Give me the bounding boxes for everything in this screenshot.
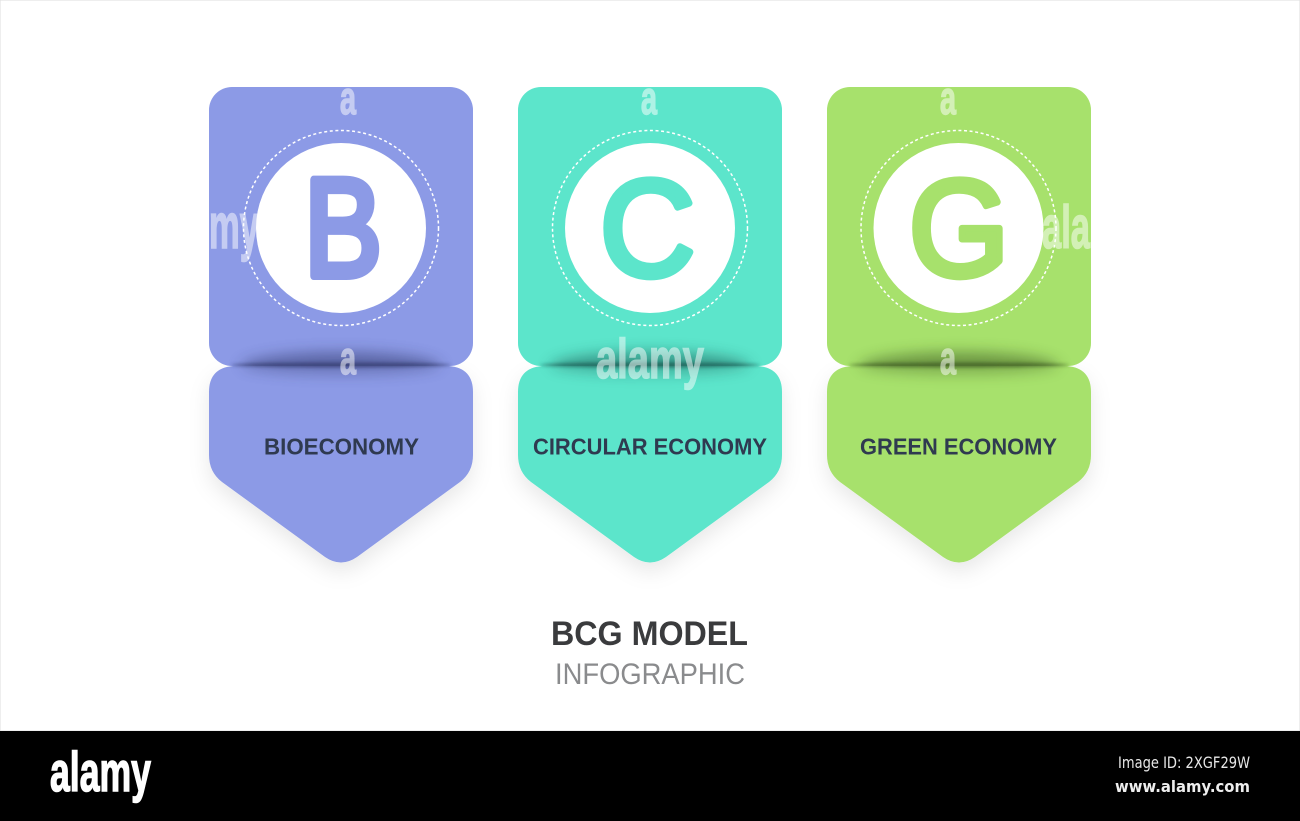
top card: circular economy: [518, 87, 782, 366]
watermark fragments: [940, 72, 1090, 384]
top card: bioeconomy: [209, 87, 473, 366]
footer band: [0, 731, 1300, 821]
watermark fragments: a: [340, 72, 356, 124]
arrow tab: bioeconomy: [209, 366, 473, 562]
dashed ring: [861, 130, 1056, 326]
fold shadow: bioeconomy: [231, 352, 451, 384]
label: bioeconomy: BIOECONOMY: [264, 434, 419, 460]
watermark fragments: ala: [1042, 194, 1090, 261]
subtitle: INFOGRAPHIC: [555, 658, 745, 691]
watermark fragments: a: [641, 72, 657, 124]
watermark fragments: my: [209, 190, 259, 262]
badge circle: [874, 143, 1044, 313]
arrow tab: green economy: [827, 366, 1091, 562]
panel: circular economy: [518, 72, 782, 562]
fold shadow: green economy: [849, 352, 1069, 384]
letter G: G: [909, 152, 1009, 306]
watermark fragments: a: [340, 332, 356, 384]
badge circle: [565, 143, 735, 313]
website: www.alamy.com: [1115, 777, 1250, 796]
watermark fragments: [209, 72, 356, 384]
letter C: C: [600, 152, 695, 306]
watermark fragments: [596, 72, 704, 390]
footer logo: alamy: [50, 740, 151, 803]
watermark fragments: a: [940, 72, 956, 124]
image id: Image ID: 2XGF29W: [1118, 753, 1250, 772]
panel: bioeconomy: [209, 72, 473, 562]
panel: green economy: [827, 72, 1091, 562]
dashed ring: [244, 130, 438, 326]
arrow tab: circular economy: [518, 366, 782, 562]
title: BCG MODEL: [551, 615, 748, 653]
top card: green economy: [827, 87, 1091, 366]
badge circle: [256, 143, 426, 313]
watermark fragments: alamy: [596, 327, 704, 390]
fold shadow: circular economy: [540, 352, 760, 384]
dashed ring: [552, 130, 748, 326]
letter B: B: [304, 149, 382, 306]
watermark fragments: a: [940, 332, 956, 384]
label: circular economy: CIRCULAR ECONOMY: [533, 434, 767, 460]
label: green economy: GREEN ECONOMY: [860, 434, 1057, 460]
